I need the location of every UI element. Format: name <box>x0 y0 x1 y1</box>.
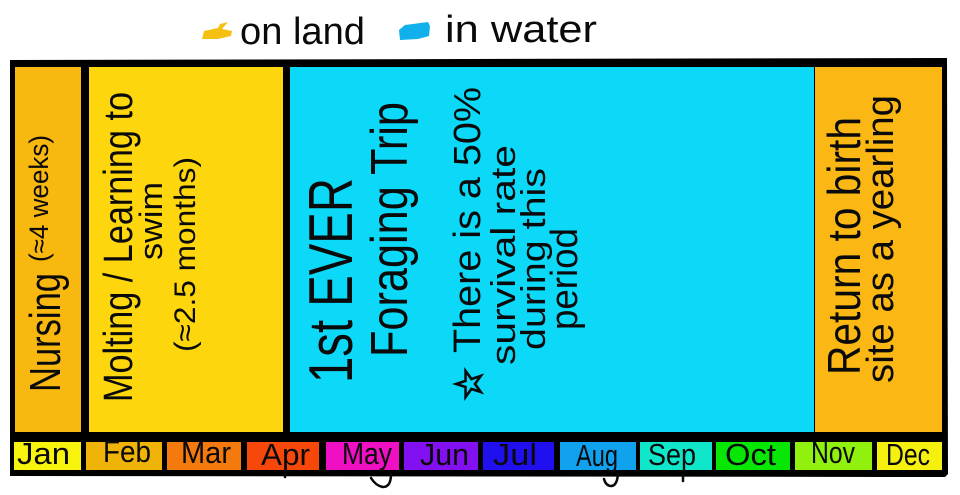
nursing label: Nursing <box>21 273 70 392</box>
icon: in water swatch <box>399 22 430 40</box>
icon: star: ☆ <box>447 367 491 401</box>
survival note: during this <box>515 168 553 350</box>
legend <box>202 9 597 53</box>
swim label: swim <box>133 182 169 260</box>
month: Feb <box>86 434 162 470</box>
nursing duration: (≈4 weeks) <box>24 135 54 262</box>
month: Feb: Feb <box>103 434 151 469</box>
month strip <box>14 434 942 473</box>
month: Apr: Apr <box>261 437 310 472</box>
panel: nursing <box>15 67 81 432</box>
month: Oct: Oct <box>725 437 776 472</box>
survival note: There is a 50% <box>447 87 489 353</box>
month: Aug: Aug <box>576 438 618 473</box>
month: Nov: Nov <box>811 435 855 470</box>
month: Mar: Mar <box>181 435 231 470</box>
legend label: in water: in water <box>445 9 597 51</box>
month: Sep: Sep <box>648 437 696 472</box>
panel: molting <box>89 67 283 432</box>
survival note: survival rate <box>485 145 523 365</box>
month: Jan: Jan <box>17 436 70 471</box>
pen strokes below the strip <box>285 474 683 487</box>
return label line 2: site as a yearling <box>860 95 902 383</box>
panel: return to birth site <box>815 67 942 432</box>
return label: Return to birth <box>818 117 870 375</box>
month: Jul <box>483 437 554 472</box>
month: Oct <box>716 437 790 472</box>
icon: on land swatch <box>202 22 232 39</box>
month: Jul: Jul <box>493 437 537 472</box>
survival note <box>447 87 586 365</box>
foraging heading line 2: Foraging Trip <box>361 102 419 357</box>
month: Jun <box>404 437 478 472</box>
survival note: period <box>544 228 586 330</box>
molting duration: (≈2.5 months) <box>169 157 202 352</box>
month: Dec: Dec <box>886 437 930 472</box>
panel: foraging trip <box>290 67 814 432</box>
month: May: May <box>342 436 392 471</box>
foraging heading: 1st EVER <box>297 178 366 383</box>
legend label: on land: on land <box>240 11 365 53</box>
month: Jun: Jun <box>420 437 469 472</box>
month: Apr <box>247 437 319 472</box>
molting label: Molting / Learning to <box>95 92 141 402</box>
